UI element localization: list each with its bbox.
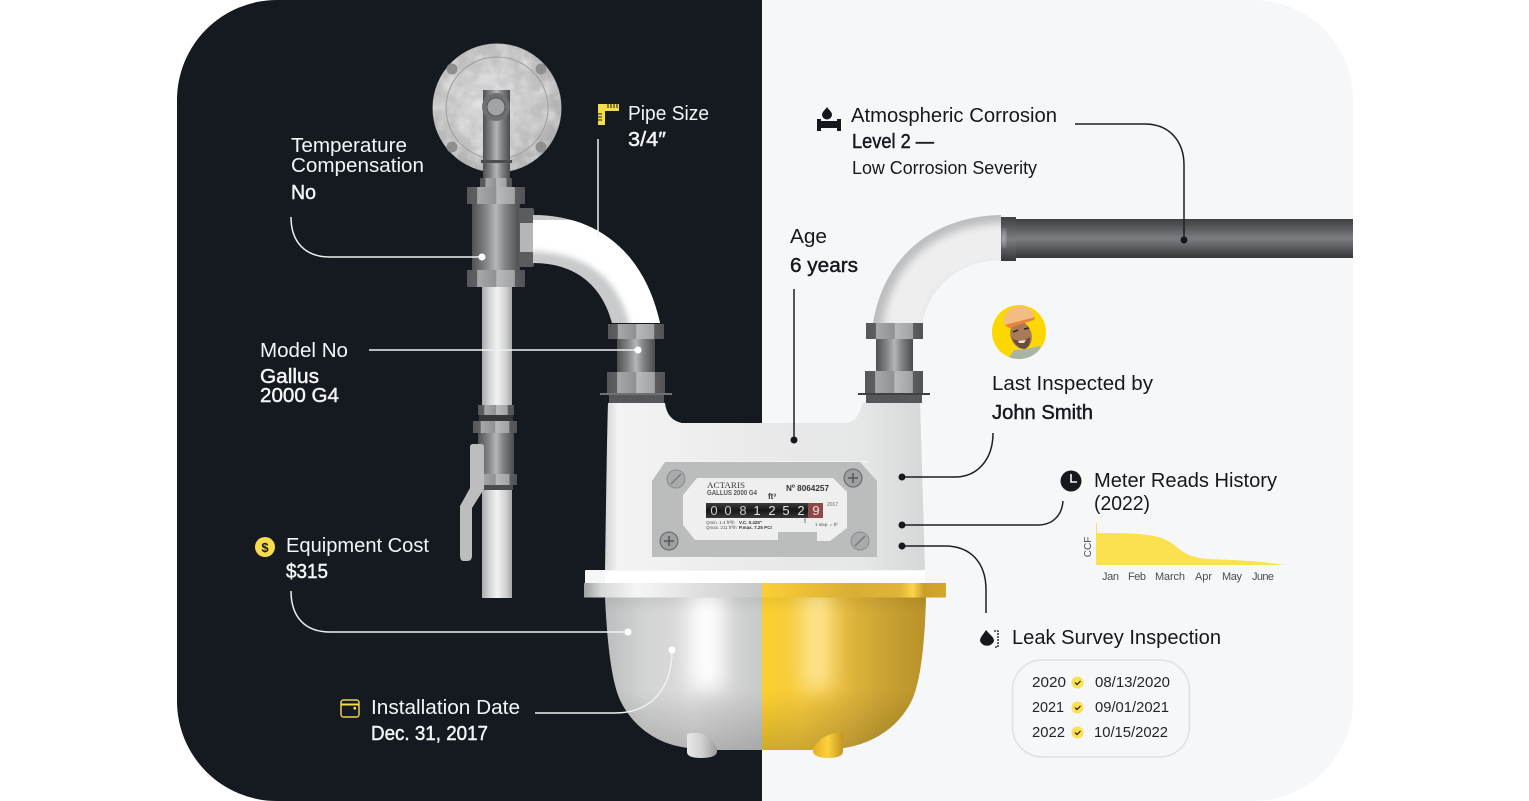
icon: leak drop with scale xyxy=(980,630,998,647)
area chart xyxy=(1083,523,1285,583)
callout: temperature compensation: No xyxy=(291,182,316,204)
callout: age: 6 years xyxy=(790,255,858,277)
meter feet xyxy=(687,732,843,758)
left vertical pipe with valve and handle xyxy=(460,285,517,598)
valve handle xyxy=(460,444,484,561)
callout: model number: 2000 G4 xyxy=(260,385,339,407)
callout: equipment cost: Equipment Cost xyxy=(286,535,429,557)
callout: temperature compensation xyxy=(291,135,486,260)
callout: installation date: Dec. 31, 2017 xyxy=(371,723,488,745)
counter dial: 2 xyxy=(768,503,776,518)
meter lower bowl xyxy=(605,598,926,750)
callout: last inspected by xyxy=(898,305,1153,480)
callout: pipe size: 3/4″ xyxy=(628,129,666,151)
maker and serial text: ACTARIS xyxy=(707,480,745,490)
icon: calendar xyxy=(341,700,359,717)
icon: inspector avatar xyxy=(992,305,1046,362)
callout: meter reads history: Meter Reads History xyxy=(1094,470,1277,492)
check marks xyxy=(1072,676,1084,738)
area chart: Jan xyxy=(1102,571,1119,583)
callout: atmospheric corrosion: Low Corrosion Severity xyxy=(852,158,1037,178)
area chart: Apr xyxy=(1195,571,1212,583)
counter dial: 0 xyxy=(710,503,718,518)
callout: age xyxy=(790,226,858,444)
callout: temperature compensation: Temperature xyxy=(291,135,407,157)
right white elbow pipe xyxy=(873,215,1001,323)
callout: model number: Gallus xyxy=(260,366,319,388)
counter dial xyxy=(706,503,823,518)
icon: dollar coin: $ xyxy=(261,540,269,555)
callout: atmospheric corrosion: Level 2 — xyxy=(852,131,934,153)
meter flange xyxy=(584,570,946,598)
icon: dollar coin xyxy=(255,537,275,557)
callout: last inspected by: Last Inspected by xyxy=(992,373,1153,395)
maker and serial text: ft³ xyxy=(768,492,776,501)
callout: meter reads history xyxy=(898,470,1285,583)
plate fine print: Qmax. 211 ft³/h xyxy=(706,525,737,530)
left white elbow pipe xyxy=(519,208,660,330)
area chart: June xyxy=(1252,571,1274,583)
callout: model number: Model No xyxy=(260,340,348,362)
callout: last inspected by: John Smith xyxy=(992,402,1093,424)
plate fine print: Qmin. 1.4 ft³/h xyxy=(706,520,735,525)
icon: clock xyxy=(1060,470,1082,492)
plate fine print: P.max. 7.25 PCI xyxy=(739,525,772,530)
callout: age: Age xyxy=(790,226,827,248)
background panel xyxy=(177,0,1353,801)
counter dial: 0 xyxy=(724,503,732,518)
icon: corrosion drop on pipe xyxy=(817,107,841,131)
counter dial: 5 xyxy=(782,503,790,518)
callout: equipment cost: $315 xyxy=(286,561,328,583)
maker and serial text: 2017 xyxy=(827,502,838,508)
area chart: March xyxy=(1155,571,1185,583)
maker and serial text: Nº 8064257 xyxy=(786,483,829,493)
maker and serial text xyxy=(707,480,838,508)
wall flange disc with stem xyxy=(432,43,562,287)
counter dial: 9 xyxy=(812,503,820,518)
right meter connection nuts xyxy=(858,323,930,403)
callout: atmospheric corrosion xyxy=(817,105,1188,244)
counter dial: 8 xyxy=(739,503,747,518)
callout: meter reads history: (2022) xyxy=(1094,493,1150,515)
callout: installation date: Installation Date xyxy=(371,697,520,719)
callout: installation date xyxy=(341,646,676,745)
left meter connection nuts xyxy=(600,324,672,403)
maker and serial text: GALLUS 2000 G4 xyxy=(707,490,757,497)
gray horizontal pipe xyxy=(1001,217,1353,261)
screws xyxy=(660,469,869,550)
icon: ruler xyxy=(598,104,619,125)
area chart: May xyxy=(1222,571,1242,583)
plate fine print: ! xyxy=(804,519,806,525)
inspection dates card: 2020 xyxy=(1032,674,1066,691)
callout: model number xyxy=(260,340,642,407)
inspection dates card: 09/01/2021 xyxy=(1095,699,1169,716)
area chart: Feb xyxy=(1128,571,1146,583)
inspection dates card: 08/13/2020 xyxy=(1095,674,1170,691)
counter dial: 2 xyxy=(797,503,805,518)
inspection dates card xyxy=(1012,660,1190,757)
callout: pipe size xyxy=(594,103,709,244)
callout: atmospheric corrosion: Atmospheric Corrosion xyxy=(851,105,1057,127)
plate fine print: 1 step. = ft³ xyxy=(815,522,838,527)
callout: temperature compensation: Compensation xyxy=(291,155,424,177)
inspection dates card: 2021 xyxy=(1032,699,1064,716)
plate fine print: V.C. 0.425" xyxy=(739,520,762,525)
callout: leak survey inspection xyxy=(898,542,1221,757)
meter nameplate xyxy=(652,462,877,557)
area chart: CCF xyxy=(1083,537,1094,557)
counter dial: 1 xyxy=(753,503,761,518)
callout: pipe size: Pipe Size xyxy=(628,103,709,125)
meter body xyxy=(584,403,946,758)
plate fine print xyxy=(706,519,838,530)
callout: leak survey inspection: Leak Survey Inspection xyxy=(1012,627,1221,649)
callout: equipment cost xyxy=(255,535,632,636)
inspection dates card: 2022 xyxy=(1032,724,1065,741)
inspection dates card: 10/15/2022 xyxy=(1094,724,1168,741)
